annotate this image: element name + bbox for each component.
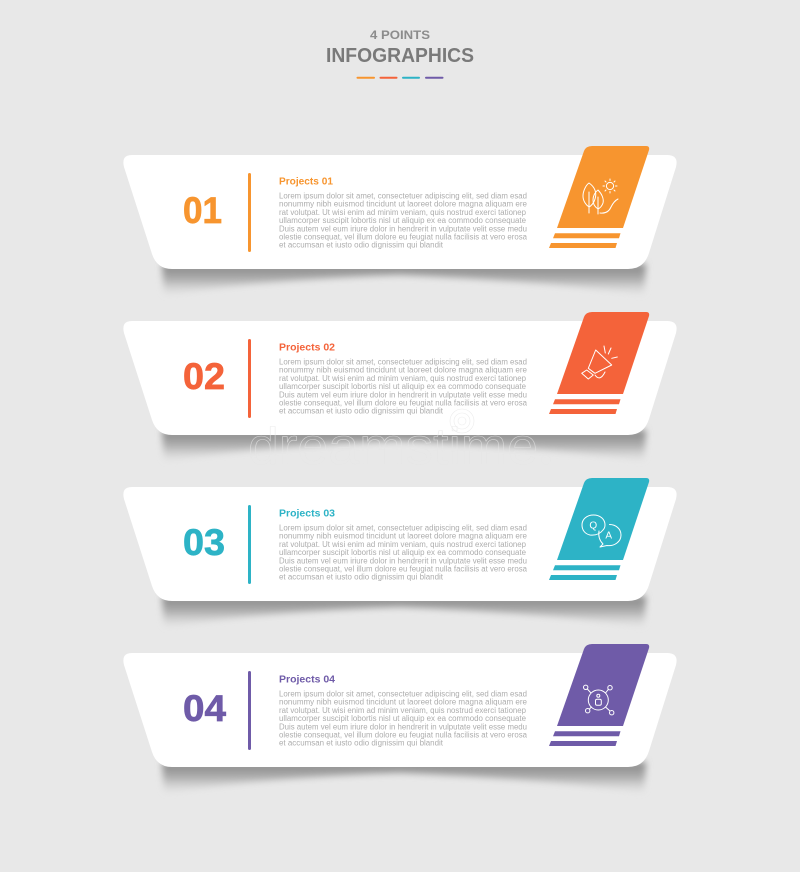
- body text: olestie consequat, vel illum dolore eu feugiat nulla facilisis at vero erosa: [279, 564, 528, 574]
- tab stripes: [549, 233, 620, 248]
- divider bar: [248, 505, 251, 584]
- body text: olestie consequat, vel illum dolore eu feugiat nulla facilisis at vero erosa: [279, 730, 528, 740]
- heading: Projects 03: [279, 508, 335, 520]
- colour tab: [557, 644, 649, 726]
- body text: nonummy nibh euismod tincidunt ut laoreet dolore magna aliquam ere: [279, 532, 528, 541]
- body text: Duis autem vel eum iriure dolor in hendrerit in vulputate velit esse medu: [279, 390, 527, 399]
- card: [123, 653, 677, 767]
- colour dashes: [356, 77, 444, 79]
- body text: ullamcorper suscipit lobortis nisl ut aliquip ex ea commodo consequate: [279, 714, 527, 723]
- card: [123, 487, 677, 601]
- header: [326, 28, 474, 79]
- body text: ullamcorper suscipit lobortis nisl ut aliquip ex ea commodo consequate: [279, 216, 527, 225]
- body text: et accumsan et iusto odio dignissim qui blandit: [279, 739, 444, 748]
- tab stripes: [549, 565, 620, 580]
- divider bar: [248, 339, 251, 418]
- icon: Q and A speech bubbles: Q: [589, 520, 597, 532]
- number: 04: [183, 688, 226, 729]
- icon: megaphone: [582, 346, 617, 379]
- card: [123, 155, 677, 269]
- card shadow: [162, 596, 646, 628]
- panel: project 04: [123, 644, 677, 794]
- colour tab: [557, 478, 649, 560]
- tab stripes: [549, 731, 620, 746]
- body text: ullamcorper suscipit lobortis nisl ut aliquip ex ea commodo consequate: [279, 548, 527, 557]
- card shadow: [162, 762, 646, 794]
- body text: Lorem ipsum dolor sit amet, consectetuer adipiscing elit, sed diam esad: [279, 192, 527, 200]
- subtitle: 4 POINTS: [370, 28, 430, 42]
- body text: olestie consequat, vel illum dolore eu feugiat nulla facilisis at vero erosa: [279, 398, 528, 408]
- panel: project 01: [123, 146, 677, 296]
- body text: ullamcorper suscipit lobortis nisl ut aliquip ex ea commodo consequate: [279, 382, 527, 391]
- card shadow: [162, 264, 646, 296]
- number: 02: [183, 356, 225, 397]
- number: 01: [183, 190, 222, 231]
- body text: Duis autem vel eum iriure dolor in hendrerit in vulputate velit esse medu: [279, 722, 527, 731]
- body text: nonummy nibh euismod tincidunt ut laoreet dolore magna aliquam ere: [279, 698, 528, 707]
- body text: Duis autem vel eum iriure dolor in hendrerit in vulputate velit esse medu: [279, 556, 527, 565]
- body text: nonummy nibh euismod tincidunt ut laoreet dolore magna aliquam ere: [279, 366, 528, 375]
- body text: olestie consequat, vel illum dolore eu feugiat nulla facilisis at vero erosa: [279, 232, 528, 242]
- colour tab: [557, 146, 649, 228]
- body text: et accumsan et iusto odio dignissim qui blandit: [279, 573, 444, 582]
- icon: Q and A speech bubbles: A: [605, 530, 612, 542]
- icon: Q and A speech bubbles: [582, 515, 621, 547]
- body text: rat volutpat. Ut wisi enim ad minim veniam, quis nostrud exerci tationep: [279, 540, 527, 549]
- watermark spiral: [450, 409, 474, 433]
- body text: nonummy nibh euismod tincidunt ut laoreet dolore magna aliquam ere: [279, 200, 528, 209]
- body text: [279, 524, 528, 582]
- body text: Lorem ipsum dolor sit amet, consectetuer adipiscing elit, sed diam esad: [279, 524, 527, 532]
- body text: rat volutpat. Ut wisi enim ad minim veniam, quis nostrud exerci tationep: [279, 374, 527, 383]
- colour tab: [557, 312, 649, 394]
- panel: project 03: [123, 478, 677, 628]
- body text: rat volutpat. Ut wisi enim ad minim veniam, quis nostrud exerci tationep: [279, 706, 527, 715]
- body text: [279, 690, 528, 748]
- body text: Lorem ipsum dolor sit amet, consectetuer adipiscing elit, sed diam esad: [279, 358, 527, 366]
- body text: Duis autem vel eum iriure dolor in hendrerit in vulputate velit esse medu: [279, 224, 527, 233]
- watermark registered mark: [542, 456, 550, 464]
- heading: Projects 02: [279, 342, 335, 354]
- heading: Projects 01: [279, 176, 333, 188]
- body text: et accumsan et iusto odio dignissim qui blandit: [279, 241, 444, 250]
- number: 03: [183, 522, 225, 563]
- body text: rat volutpat. Ut wisi enim ad minim veniam, quis nostrud exerci tationep: [279, 208, 527, 217]
- panel: project 02: [123, 312, 677, 462]
- divider bar: [248, 173, 251, 252]
- card shadow: [162, 430, 646, 462]
- icon: leaves and sun: [583, 179, 618, 214]
- card: [123, 321, 677, 435]
- body text: Lorem ipsum dolor sit amet, consectetuer adipiscing elit, sed diam esad: [279, 690, 527, 698]
- watermark wordmark: dreamstime: [248, 418, 538, 476]
- body text: [279, 358, 528, 416]
- icon: network person: [584, 685, 614, 715]
- watermark: [248, 409, 550, 476]
- body text: et accumsan et iusto odio dignissim qui blandit: [279, 407, 444, 416]
- body text: [279, 192, 528, 250]
- tab stripes: [549, 399, 620, 414]
- title: INFOGRAPHICS: [326, 45, 474, 67]
- divider bar: [248, 671, 251, 750]
- heading: Projects 04: [279, 674, 335, 686]
